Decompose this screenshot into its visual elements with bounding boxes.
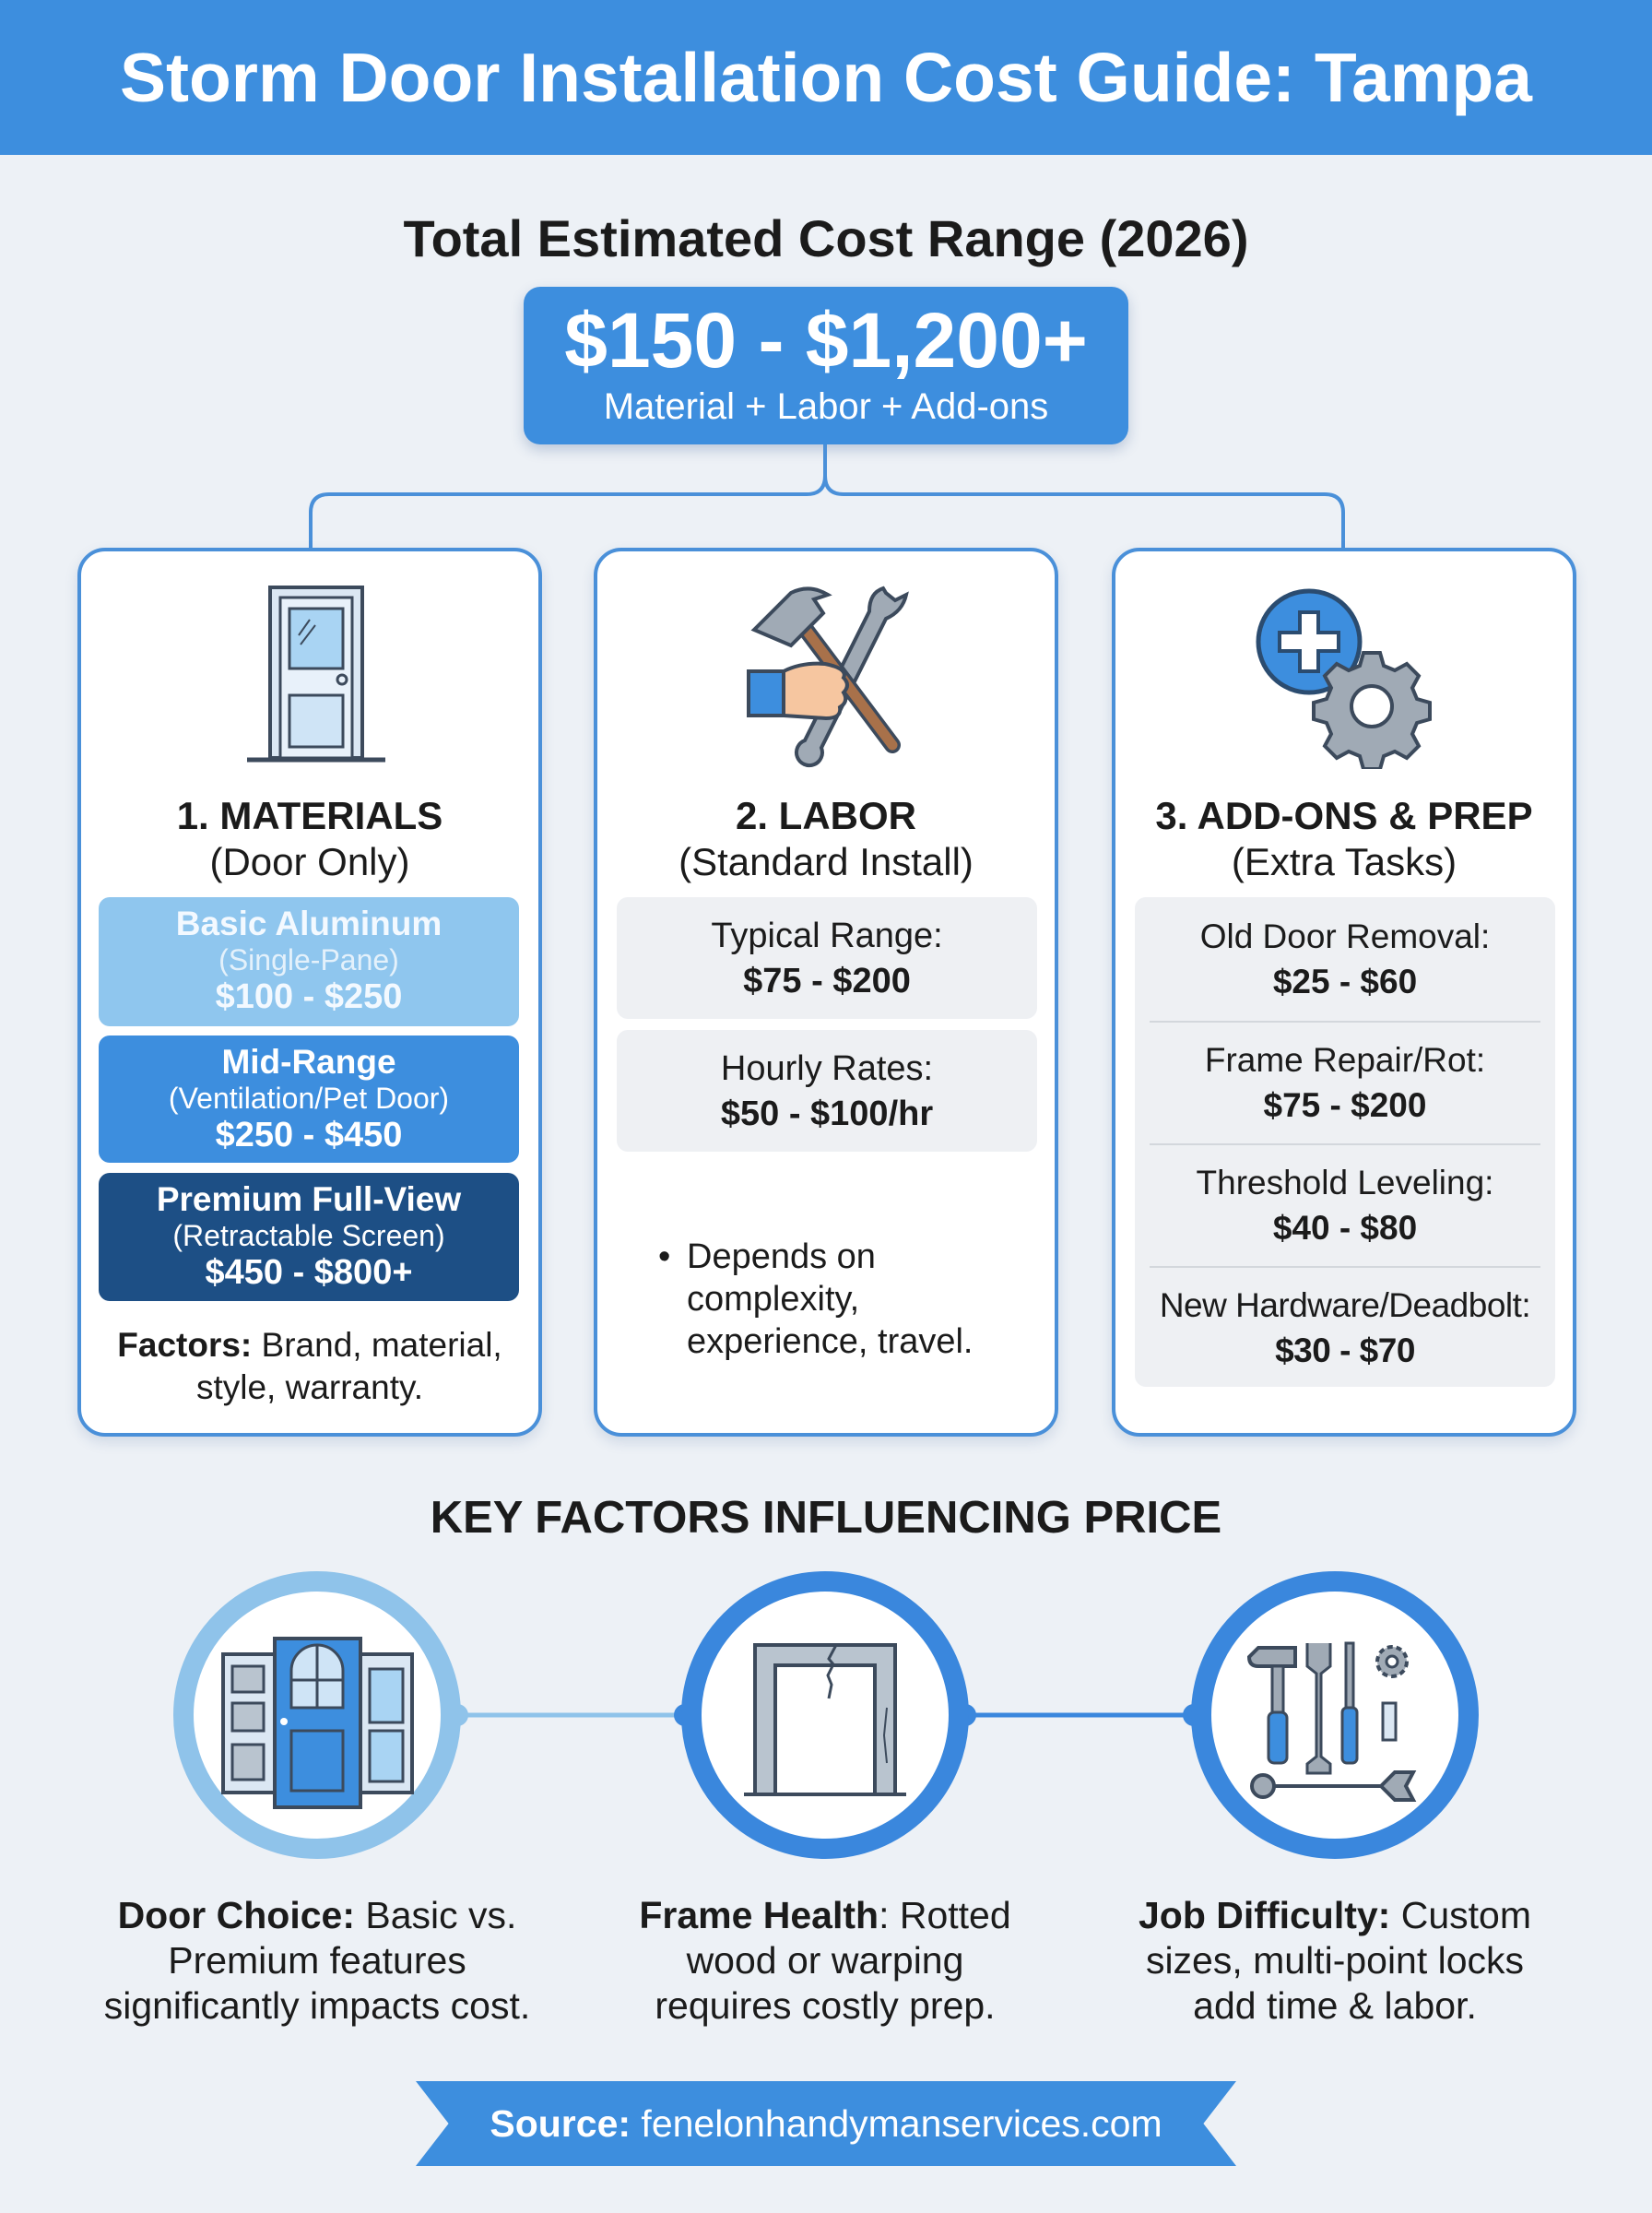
box: add-on list: $25 - $60 [1273, 963, 1417, 1000]
text: job difficulty: add time & labor. [1193, 1984, 1477, 2027]
connector lines between circles [461, 1704, 1191, 1726]
text: door choice: Door Choice: Basic vs. [118, 1894, 516, 1936]
icon: hammer and wrench [747, 586, 909, 767]
tier: basic aluminum: $100 - $250 [216, 977, 402, 1016]
heading: labor: (Standard Install) [678, 840, 974, 883]
header bar [0, 0, 1652, 155]
box: add-on list [1135, 897, 1555, 1387]
heading: materials: (Door Only) [209, 840, 410, 883]
source ribbon [416, 2081, 1236, 2166]
factors text: Factors: Brand, material, [117, 1326, 502, 1364]
tier: premium: $450 - $800+ [205, 1253, 413, 1292]
text: job difficulty: sizes, multi-point locks [1146, 1939, 1524, 1982]
tier: premium [99, 1173, 519, 1301]
box: hourly rates: $50 - $100/hr [721, 1095, 933, 1133]
icon: plus and gear [1256, 588, 1432, 769]
connector lines [309, 444, 1345, 548]
panel: add-ons [1112, 548, 1576, 1437]
box: add-on list: Threshold Leveling: [1197, 1164, 1493, 1201]
source ribbon: Source: fenelonhandymanservices.com [490, 2102, 1162, 2145]
box: add-on list: Old Door Removal: [1200, 917, 1490, 955]
tier: premium: Premium Full-View [157, 1180, 461, 1218]
box: add-on list: $75 - $200 [1264, 1086, 1426, 1124]
text: frame health: requires costly prep. [655, 1984, 996, 2027]
heading: add-ons: 3. ADD-ONS & PREP [1155, 794, 1533, 837]
box: hourly rates [617, 1030, 1037, 1152]
text: frame health [639, 1894, 1011, 2027]
heading: key factors: KEY FACTORS INFLUENCING PRICE [431, 1493, 1221, 1543]
bullet text: • [658, 1237, 670, 1276]
heading: materials: 1. MATERIALS [177, 794, 442, 837]
text: door choice: significantly impacts cost. [104, 1984, 530, 2027]
heading: labor: 2. LABOR [736, 794, 916, 837]
text: job difficulty: Job Difficulty: Custom [1139, 1894, 1531, 1936]
subtitle: Total Estimated Cost Range (2026) [404, 209, 1248, 267]
text: door choice [104, 1894, 530, 2027]
icon circle: frame health [681, 1571, 969, 1859]
box: typical range: Typical Range: [711, 917, 943, 955]
text: door choice: Premium features [168, 1939, 466, 1982]
tier: mid-range: $250 - $450 [216, 1116, 402, 1154]
total cost box: Material + Labor + Add-ons [604, 386, 1048, 427]
bullet text [658, 1237, 974, 1361]
text: frame health: wood or warping [687, 1939, 963, 1982]
tier: premium: (Retractable Screen) [172, 1219, 445, 1252]
factors text [117, 1326, 502, 1406]
icon circle: job difficulty [1191, 1571, 1479, 1859]
header bar: Storm Door Installation Cost Guide: Tampa [120, 39, 1532, 116]
panel: labor [594, 548, 1058, 1437]
heading: add-ons [1155, 794, 1533, 883]
bullet text: experience, travel. [687, 1322, 974, 1361]
box: add-on list: New Hardware/Deadbolt: [1160, 1286, 1530, 1324]
tier: basic aluminum: (Single-Pane) [218, 943, 399, 976]
heading: materials [177, 794, 442, 883]
total cost box: $150 - $1,200+ [564, 297, 1088, 384]
box: typical range [617, 897, 1037, 1019]
box: add-on list: Frame Repair/Rot: [1205, 1041, 1485, 1079]
bullet text: complexity, [687, 1280, 859, 1319]
total cost box [524, 287, 1128, 444]
heading: labor [678, 794, 974, 883]
tier: basic aluminum: Basic Aluminum [176, 905, 442, 942]
tier: mid-range: Mid-Range [221, 1043, 396, 1081]
box: typical range: $75 - $200 [743, 962, 911, 1000]
bullet text: Depends on [687, 1237, 876, 1276]
box: hourly rates: Hourly Rates: [721, 1049, 933, 1088]
text: job difficulty [1139, 1894, 1531, 2027]
factors text: style, warranty. [196, 1368, 423, 1406]
tier: mid-range: (Ventilation/Pet Door) [169, 1082, 449, 1115]
icon circle: door choice [173, 1571, 461, 1859]
icon: door [247, 586, 385, 762]
box: add-on list: $30 - $70 [1275, 1331, 1415, 1369]
box: add-on list: $40 - $80 [1273, 1209, 1417, 1247]
tier: basic aluminum [99, 897, 519, 1026]
text: frame health: Frame Health: Rotted [639, 1894, 1011, 1936]
tier: mid-range [99, 1035, 519, 1163]
heading: add-ons: (Extra Tasks) [1232, 840, 1457, 883]
panel: materials [77, 548, 542, 1437]
